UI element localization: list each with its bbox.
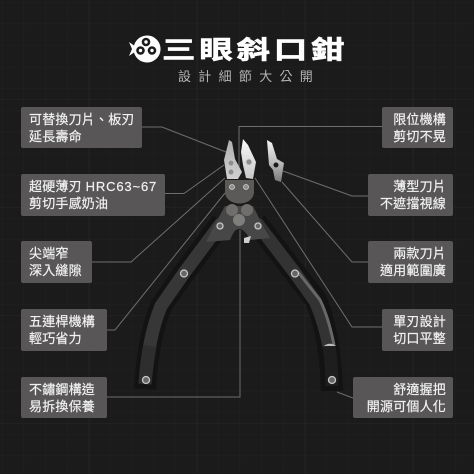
right handle — [256, 222, 336, 391]
right blade — [241, 139, 256, 179]
callout: stainless construction — [21, 376, 107, 418]
callout: hard thin blade: 剪切手感奶油 — [29, 196, 108, 211]
left blade — [224, 140, 242, 179]
callout: replaceable blades — [21, 106, 142, 148]
callout: two blade types: 兩款刀片 — [393, 246, 446, 261]
callout: thin blade view: 不遮擋視線 — [380, 196, 446, 211]
pliers illustration — [142, 139, 336, 391]
body plate — [206, 206, 270, 242]
title: 三眼斜口鉗 — [162, 37, 348, 64]
callout: stainless construction: 易拆換保養 — [29, 398, 95, 414]
callout: sharp narrow tip: 尖端窄 — [29, 246, 69, 261]
callout: single edge — [382, 309, 453, 350]
callout: replaceable blades: 延長壽命 — [29, 128, 82, 144]
callout: five-bar linkage: 五連桿機構 — [29, 314, 95, 329]
callout: hard thin blade — [21, 174, 165, 216]
callout: thin blade view — [368, 174, 453, 216]
centre plate — [225, 180, 254, 204]
callout: five-bar linkage: 輕巧省力 — [29, 331, 82, 346]
callout: single edge: 單刃設計 — [393, 314, 446, 329]
callout: thin blade view: 薄型刀片 — [393, 179, 446, 194]
subtitle: 設計細節大公開 — [178, 69, 320, 84]
callout: single edge: 切口平整 — [393, 331, 446, 346]
callout leader lines — [92, 126, 382, 398]
callout: comfortable grip — [353, 376, 453, 418]
spring — [244, 236, 251, 243]
left handle — [145, 222, 222, 389]
linkage circles — [226, 204, 238, 216]
callout: comfortable grip: 舒適握把 — [393, 382, 446, 396]
screws — [142, 223, 336, 384]
callout: five-bar linkage — [21, 309, 107, 350]
third blade (separate) — [267, 140, 284, 182]
callout: comfortable grip: 開源可個人化 — [367, 398, 446, 414]
callout: stainless construction: 不鏽鋼構造 — [29, 382, 95, 396]
callout: hard thin blade: 超硬薄刃 HRC63~67 — [29, 179, 157, 194]
callout: sharp narrow tip — [21, 241, 92, 282]
logo icon — [129, 35, 161, 62]
rivets — [228, 159, 252, 190]
callout: two blade types: 適用範圍廣 — [380, 263, 446, 278]
callout: replaceable blades: 可替換刀片、板刃 — [29, 112, 135, 126]
callout: limit mechanism: 限位機構 — [393, 112, 446, 126]
callout: limit mechanism: 剪切不晃 — [393, 128, 446, 144]
callout: limit mechanism — [382, 106, 453, 148]
callout: two blade types — [368, 241, 453, 282]
callout: sharp narrow tip: 深入縫隙 — [29, 263, 82, 278]
